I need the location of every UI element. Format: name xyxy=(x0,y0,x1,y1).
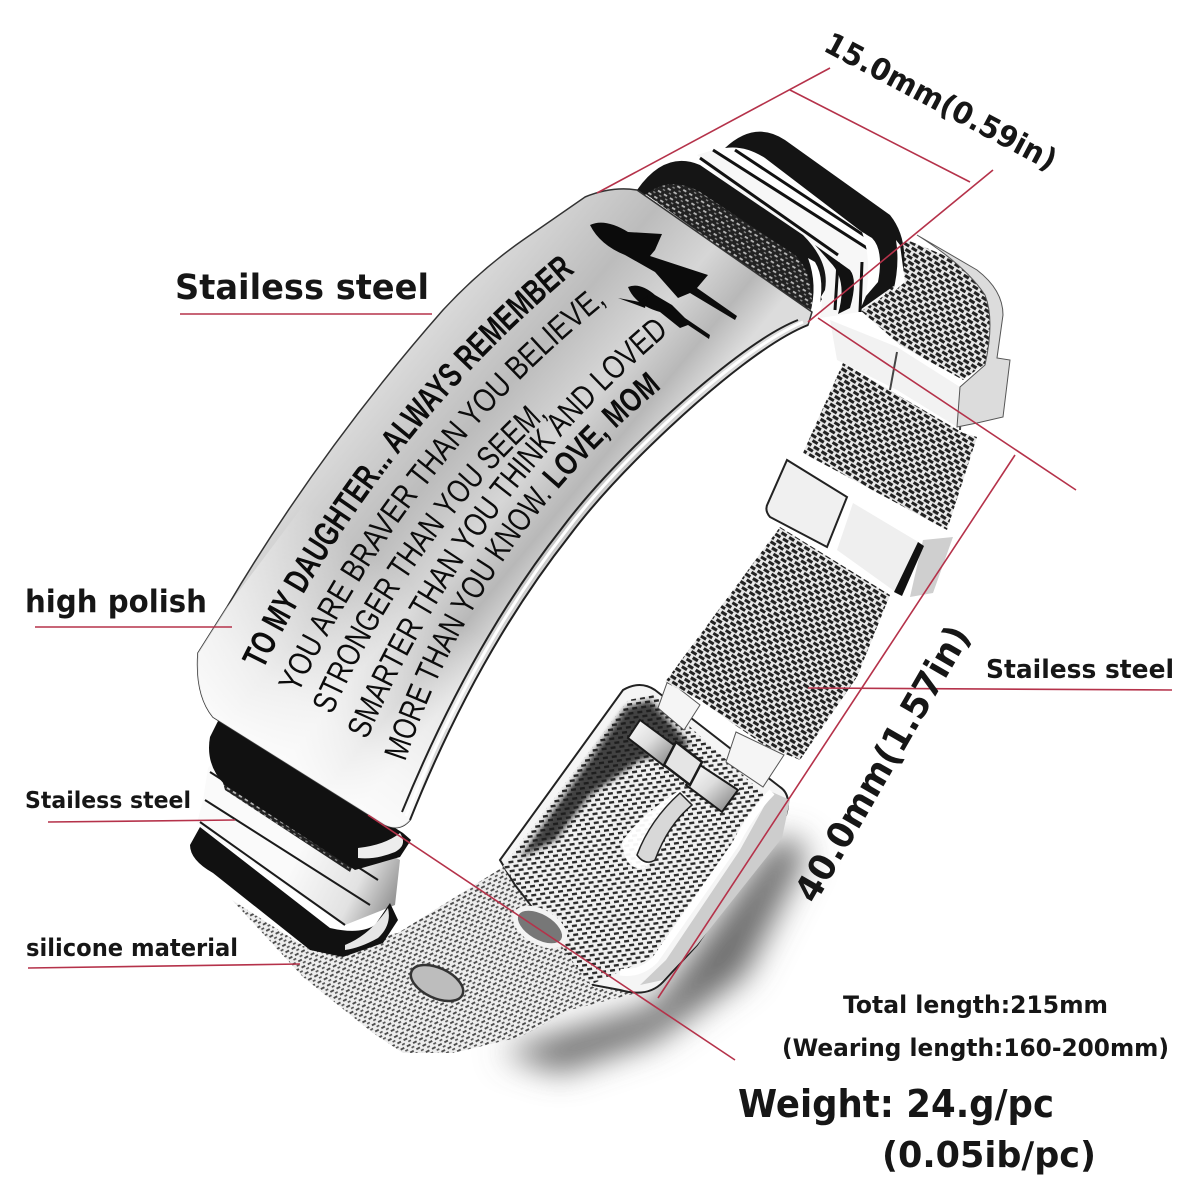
sliding keeper xyxy=(766,460,924,596)
steel strap end under keeper xyxy=(910,537,953,597)
buckle pin xyxy=(622,680,784,868)
clear strap end xyxy=(830,320,960,427)
mesh strap: hole 1 xyxy=(405,958,469,1008)
label: high polish: high polish xyxy=(25,584,207,620)
spec: total length: Total length:215mm xyxy=(843,991,1108,1019)
label: stack material: Stailess steel xyxy=(25,788,191,814)
label: plate material: Stailess steel xyxy=(175,268,429,308)
bracelet illustration xyxy=(190,132,1010,1053)
strap end seam xyxy=(890,352,962,430)
buckle side bar xyxy=(640,792,790,985)
spec: weight: Weight: 24.g/pc xyxy=(738,1082,1054,1126)
engraved plate xyxy=(198,189,812,828)
engraved inscription xyxy=(242,256,664,760)
line 4: SMARTER THAN YOU THINK AND LOVED xyxy=(348,320,664,737)
white inner rim of buckle side xyxy=(620,792,772,972)
mesh loop at top right xyxy=(860,240,993,380)
steel rim of strap loop xyxy=(917,235,1010,427)
icon: mother and daughter silhouette xyxy=(590,223,737,339)
line 3: STRONGER THAN YOU SEEM, xyxy=(314,405,548,712)
line 5: MORE THAN YOU KNOW. LOVE, MOM xyxy=(384,372,660,760)
plate highlight towards the lower end xyxy=(198,470,560,828)
mesh strap: section above keeper xyxy=(803,363,977,530)
lower left hardware xyxy=(190,717,411,957)
dimension: width: 15.0mm(0.59in) xyxy=(818,26,1062,178)
line 1: TO MY DAUGHTER... ALWAYS REMEMBER xyxy=(242,256,575,665)
mesh strap: lower left tail xyxy=(232,867,637,1053)
dimension: length: 40.0mm(1.57in) xyxy=(787,619,979,910)
plate bevel highlight xyxy=(406,322,803,816)
spec: wearing length: (Wearing length:160-200mm) xyxy=(782,1034,1169,1062)
label: silicone material: silicone material xyxy=(26,934,238,962)
dark inner edge of buckle xyxy=(520,700,690,858)
upper hardware: steel stack and silicone rings xyxy=(637,132,905,318)
line 2: YOU ARE BRAVER THAN YOU BELIEVE, xyxy=(278,290,607,688)
mesh strap: hole 2 xyxy=(509,901,571,953)
buckle frame xyxy=(500,685,788,993)
label: strap material: Stailess steel xyxy=(986,655,1174,685)
mesh strap: upper section xyxy=(665,527,890,760)
spec: weight in ounces: (0.05ib/pc) xyxy=(882,1135,1096,1176)
red leader lines xyxy=(28,68,1172,1060)
drop shadow xyxy=(500,835,808,1072)
plate bevel lines xyxy=(402,320,808,820)
mesh inside buckle xyxy=(503,695,765,985)
